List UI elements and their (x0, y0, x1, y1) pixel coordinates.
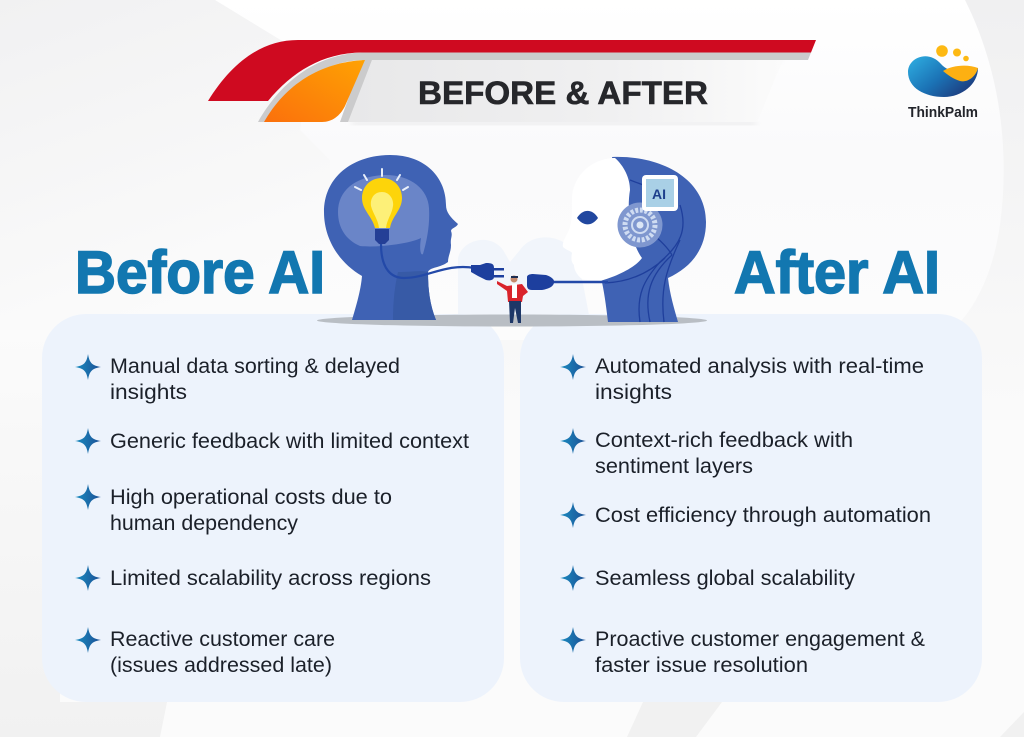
item: manual data: Manual data sorting & delayed (110, 354, 400, 378)
banner shadow (370, 56, 780, 64)
robot face (563, 158, 642, 281)
illustration: AI head: AI (652, 186, 666, 202)
red swoosh (208, 40, 816, 101)
item: limited scalability: Limited scalability across regions (110, 566, 431, 590)
item: proactive engagement: Proactive customer engagement & (595, 627, 925, 651)
bulb rays (355, 169, 408, 190)
item: reactive care (75, 627, 335, 677)
illustration: AI head (527, 157, 706, 322)
title banner (208, 40, 816, 125)
item: reactive care: (issues addressed late) (110, 653, 332, 677)
item: generic feedback: Generic feedback with limited context (110, 429, 469, 453)
gear ear (618, 202, 662, 248)
item: context-rich (560, 428, 853, 478)
illustration: human head with bulb (324, 155, 504, 320)
AI cable (550, 281, 608, 283)
item: automated analysis: Automated analysis with real-time (595, 354, 924, 378)
bulb (362, 178, 402, 228)
eye (577, 211, 598, 224)
item: context-rich: Context-rich feedback with (595, 428, 853, 452)
item: global scalability: Seamless global scalability (595, 566, 855, 590)
panel: before AI (42, 314, 504, 702)
item: cost efficiency: Cost efficiency through automation (595, 503, 931, 527)
bulb cable (381, 244, 475, 278)
logo: ThinkPalm (908, 45, 978, 121)
title panel (348, 60, 783, 122)
item: automated analysis (560, 354, 924, 404)
logo: ThinkPalm: ThinkPalm (908, 105, 978, 121)
brain glow (338, 175, 429, 254)
left plug (471, 263, 504, 280)
heading: Before AI: Before AI (75, 239, 325, 306)
item: manual data (75, 354, 400, 404)
neural wires (605, 180, 683, 322)
orange leaf (264, 60, 365, 122)
item: proactive engagement: faster issue resolution (595, 653, 808, 677)
item: operational costs: human dependency (110, 511, 298, 535)
item: operational costs (75, 484, 392, 535)
item: reactive care: Reactive customer care (110, 627, 335, 651)
illustration: ground shadow (317, 314, 707, 326)
title: BEFORE & AFTER (418, 75, 708, 111)
panel: after AI (520, 314, 982, 702)
heading: After AI: After AI (734, 239, 940, 306)
item: manual data: insights (110, 380, 187, 404)
item: automated analysis: insights (595, 380, 672, 404)
grey swoosh edge (258, 52, 811, 122)
illustration: man joining plugs (497, 276, 528, 323)
item: context-rich: sentiment layers (595, 454, 753, 478)
item: proactive engagement (560, 627, 925, 677)
AI chip (642, 175, 678, 211)
right plug (527, 274, 554, 290)
item: operational costs: High operational costs due to (110, 485, 392, 509)
